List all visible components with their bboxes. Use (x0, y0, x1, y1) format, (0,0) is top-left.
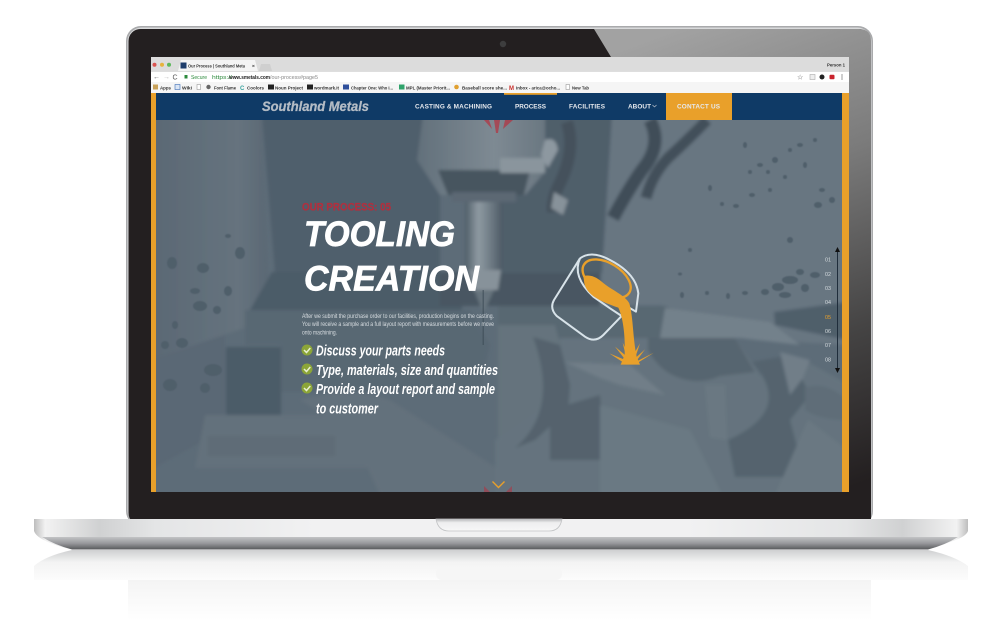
bookmarks bar: Inbox - arica@ocho... (516, 86, 560, 92)
bookmarks bar: Apps (160, 86, 171, 92)
spindle tool (417, 115, 545, 195)
pager numbers: 03 (825, 286, 831, 292)
intro paragraph: After we submit the purchase order to our facilities, production begins on the casting. (302, 314, 494, 320)
address toolbar: → (163, 74, 170, 81)
bookmarks bar: C (240, 86, 245, 92)
nav links: FACILITIES (569, 103, 606, 110)
browser window chrome (151, 57, 849, 93)
address toolbar: ← (153, 74, 160, 81)
drill bit (483, 290, 484, 345)
item: parts needs: Discuss your parts needs (316, 344, 445, 360)
step label: OUR PROCESS: 05 (302, 202, 391, 214)
pager numbers: 04 (825, 300, 831, 306)
title: CREATION (304, 260, 480, 298)
nav links: ABOUT (628, 103, 651, 110)
contact button (666, 93, 732, 120)
right orange side bar (842, 93, 849, 492)
nav links (415, 103, 656, 110)
nav links: CASTING & MACHINING (415, 103, 492, 110)
pager numbers: 05 (825, 315, 831, 321)
laptop lid (126, 26, 873, 526)
bookmarks bar: Coolors (247, 86, 264, 92)
bookmarks bar: MPL (Master Priorit... (406, 86, 450, 92)
bookmarks bar (151, 82, 849, 93)
laptop base (34, 519, 968, 550)
pager numbers: 07 (825, 343, 831, 349)
left column (235, 120, 242, 329)
intro paragraph (302, 314, 495, 336)
speckles (161, 138, 835, 393)
faint red top arrow marks (484, 120, 513, 133)
address toolbar: ☆ (797, 74, 803, 82)
site navigation bar (156, 93, 842, 120)
item: layout report: Provide a layout report and sample (316, 382, 495, 398)
logo: Southland Metals (262, 98, 369, 114)
coolant hoses (553, 122, 570, 212)
nav links: PROCESS (515, 103, 547, 110)
dark column right (500, 115, 612, 273)
photo background: machining (150, 115, 850, 495)
pager numbers: 06 (825, 329, 831, 335)
glass reflection on bezel (594, 29, 871, 519)
address toolbar (151, 71, 849, 82)
profile label: Person 1 (827, 62, 845, 68)
bookmarks bar: Font Flame (214, 86, 236, 92)
checklist (302, 344, 498, 417)
center plate and molds (500, 326, 558, 432)
pager arrow (835, 247, 840, 373)
address toolbar: https:// (212, 75, 233, 81)
item: parts needs (302, 344, 445, 360)
icon: crucible pouring molten metal (552, 252, 654, 365)
bookmarks bar: M (509, 86, 514, 92)
textured metal plate (600, 115, 847, 345)
address toolbar: www.smetals.com (228, 75, 270, 81)
bookmarks bar: New Tab (572, 86, 589, 92)
bookmarks bar: Wiki (182, 86, 192, 92)
bookmarks bar: wordmark.it (313, 86, 339, 92)
address toolbar: /our-process#page5 (270, 75, 318, 81)
bookmarks bar: Noun Project (275, 86, 303, 92)
item: layout report (302, 382, 495, 417)
item: layout report: to customer (316, 401, 379, 417)
faint red bottom arrow marks (484, 486, 512, 492)
intro paragraph: onto machining. (302, 330, 337, 336)
webcam (500, 41, 506, 47)
laptop notch (436, 519, 562, 531)
title (304, 215, 480, 298)
active tab: Our Process | Southland Meta (188, 64, 245, 70)
scroll down chevron (492, 482, 504, 488)
active tab underline (504, 93, 557, 95)
pager numbers: 01 (825, 258, 831, 264)
address toolbar: C (172, 74, 178, 82)
pager numbers (825, 258, 831, 364)
bookmarks bar: Baseball score she... (462, 86, 507, 92)
active tab (178, 60, 258, 71)
address toolbar: Secure (191, 75, 207, 81)
laptop reflection (34, 550, 968, 620)
section pager (825, 247, 840, 373)
window buttons (152, 63, 171, 67)
contact button: CONTACT US (677, 103, 721, 110)
intro paragraph: You will receive a sample and a full layout report with measurements before we move (302, 322, 495, 328)
bookmarks bar: Chapter One: Who I... (351, 86, 393, 92)
pager numbers: 02 (825, 272, 831, 278)
active tab: × (252, 64, 255, 70)
item: type and materials: Type, materials, size and quantities (316, 363, 498, 379)
title: TOOLING (304, 215, 455, 254)
left orange side bar (151, 93, 156, 492)
pager numbers: 08 (825, 358, 831, 364)
